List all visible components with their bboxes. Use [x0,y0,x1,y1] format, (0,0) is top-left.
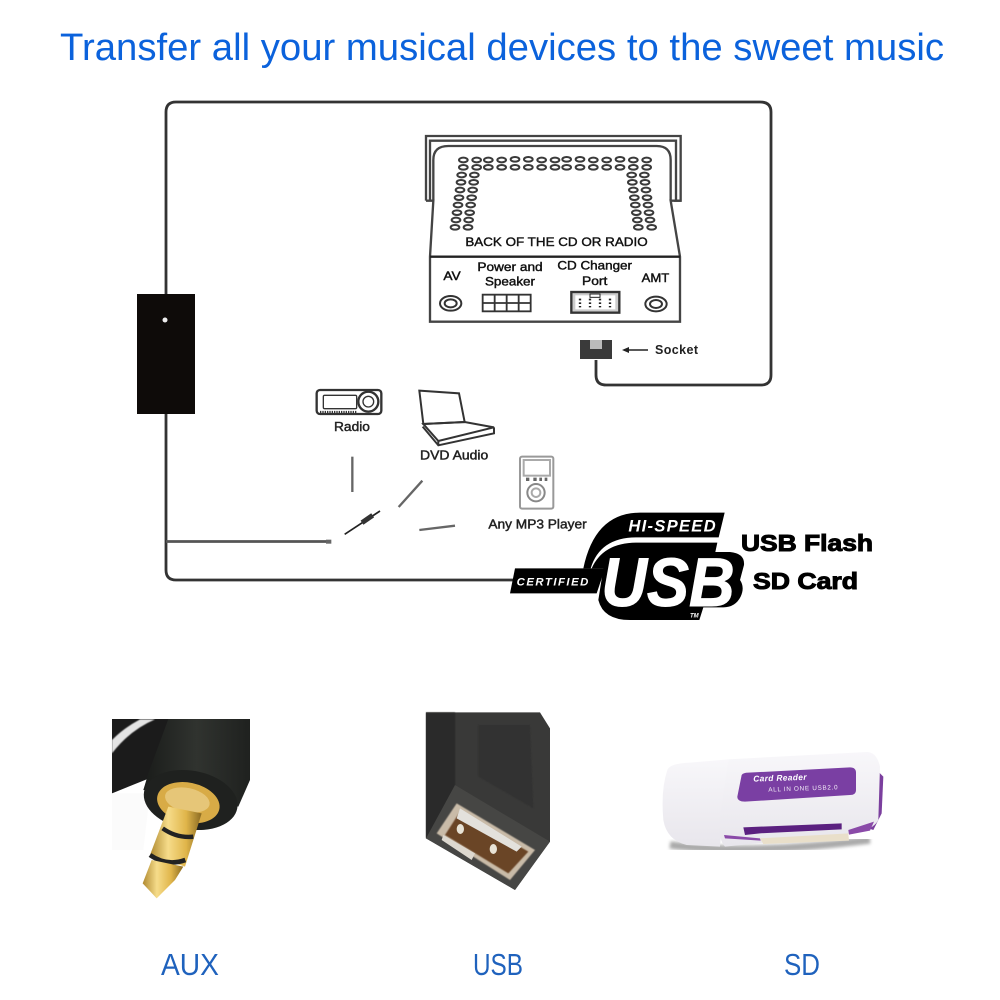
MP3 label: Any MP3 Player [488,518,587,532]
title: Transfer all your musical devices to the sweet music [60,27,944,69]
socket label: Socket [655,343,699,357]
USB Flash label: USB Flash [741,530,873,556]
AUX label: AUX [161,947,219,982]
photo: SD card reader [663,752,883,849]
devices [317,390,587,544]
icon: laptop [419,391,494,445]
radio label: Radio [334,420,370,434]
wire end [326,540,331,544]
socket connector [580,340,612,359]
DVD audio label: DVD Audio [420,448,488,462]
CD changer connector [571,292,619,313]
AV jack [440,296,461,311]
card reader text: Card Reader [753,772,807,784]
photo: USB socket [426,712,550,890]
AMT jack [645,297,667,311]
SD Card label: SD Card [753,568,858,594]
photo: AUX plug [112,719,250,898]
certified text: CERTIFIED [517,577,588,589]
USB logo [510,513,744,621]
power and speaker connector [483,295,531,311]
icon: MP3 player [520,457,553,509]
port labels: Speaker [485,274,535,288]
USB text: USB [601,545,735,621]
port labels [443,259,670,288]
link lines [352,457,455,530]
hi-speed text: HI-SPEED [628,516,716,535]
SD label: SD [784,947,820,982]
USB label: USB [473,947,523,982]
photo: SD card reader: ALL IN ONE USB2.0 [768,784,838,794]
icon: radio [317,390,381,414]
inline control box [137,294,195,414]
unit heading: BACK OF THE CD OR RADIO [465,235,648,249]
wiring frame [166,102,771,580]
port labels: Power and [477,260,543,274]
arrow to socket [622,347,648,353]
audio splitter plug [345,511,380,534]
speaker dot grid [451,157,656,230]
trademark: TM [690,613,700,619]
back of the CD or radio unit [426,136,681,322]
port labels: Port [582,274,608,288]
port labels: AMT [642,271,670,285]
port labels: CD Changer [557,259,632,273]
port labels: AV [443,269,462,283]
